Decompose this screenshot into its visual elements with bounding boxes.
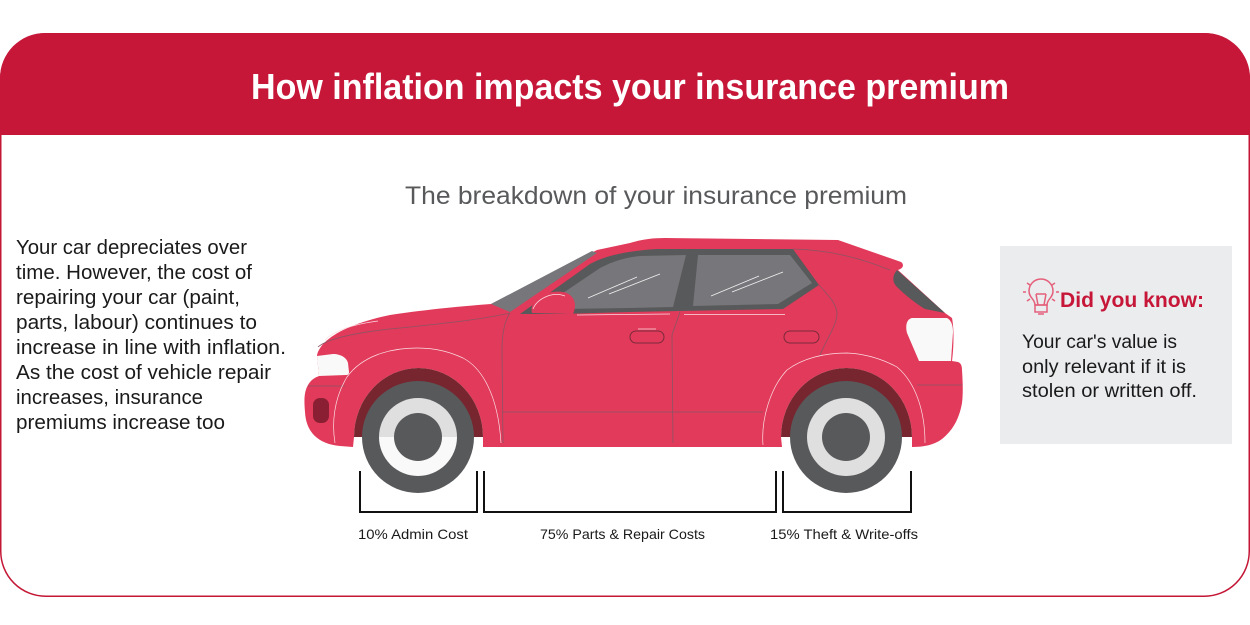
label: theft and write-offs: 15% Theft & Write-offs: [770, 526, 918, 542]
wing mirror: [532, 292, 575, 314]
bracket: parts and repair: [484, 471, 776, 512]
bracket: theft and write-offs: [783, 471, 911, 512]
callout text: stolen or written off.: [1022, 381, 1197, 402]
front wheel: [362, 381, 474, 493]
text block: explanation: increase in line with inflation.: [16, 337, 286, 359]
front window: [560, 255, 686, 309]
body panel lines: [308, 249, 962, 443]
text block: explanation: premiums increase too: [16, 412, 225, 434]
fog lamp: [313, 398, 329, 423]
rear quarter glass: [893, 270, 945, 313]
windshield: [491, 251, 597, 312]
window frame: [520, 249, 819, 314]
rear window: [693, 255, 812, 306]
door handles: [630, 331, 819, 343]
highlights: [325, 294, 925, 445]
title: How inflation impacts your insurance premium: [251, 66, 1009, 107]
header band: [0, 33, 1250, 135]
callout text: only relevant if it is: [1022, 357, 1186, 378]
illustration: car: [304, 238, 963, 493]
car body: [304, 238, 963, 447]
callout text: [1022, 332, 1197, 402]
text block: explanation: increases, insurance: [16, 387, 203, 409]
window reflections: [588, 272, 783, 298]
panel: did you know: [1000, 246, 1232, 444]
callout heading: Did you know:: [1060, 289, 1204, 312]
label: admin cost: 10% Admin Cost: [358, 526, 468, 542]
callout text: Your car's value is: [1022, 332, 1177, 353]
text block: explanation: [16, 237, 286, 434]
text block: explanation: repairing your car (paint,: [16, 287, 240, 309]
text block: explanation: time. However, the cost of: [16, 262, 252, 284]
text block: explanation: parts, labour) continues to: [16, 312, 257, 334]
bracket: admin cost: [360, 471, 477, 512]
tail light: [906, 318, 953, 361]
text block: explanation: Your car depreciates over: [16, 237, 247, 259]
icon: light bulb: [1023, 279, 1059, 314]
headlight: [317, 354, 349, 376]
rear wheel: [790, 381, 902, 493]
label: parts and repair: 75% Parts & Repair Costs: [540, 526, 705, 542]
text block: explanation: As the cost of vehicle repair: [16, 362, 271, 384]
subheading: The breakdown of your insurance premium: [405, 182, 907, 210]
wheel arch shadows: [354, 368, 912, 437]
